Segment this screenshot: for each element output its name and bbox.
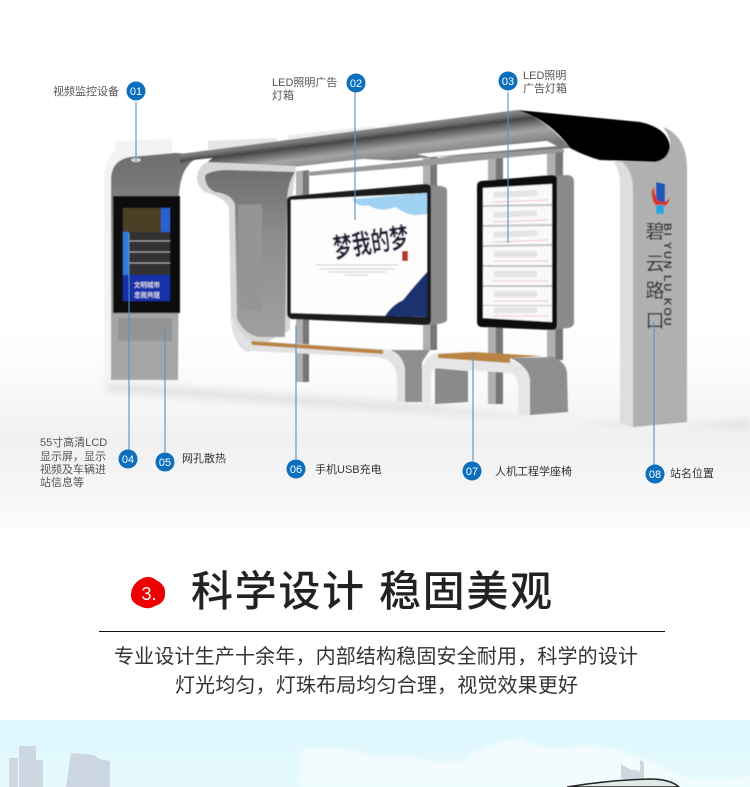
callout 04: 显示屏，显示: [40, 450, 106, 463]
callout 03: LED照明: [523, 69, 566, 82]
title: 科学设计 稳固美观: [191, 568, 552, 615]
poster 2: timetable: [477, 175, 574, 330]
callout 02: 灯箱: [272, 88, 294, 102]
callout 08: 08: [649, 469, 661, 481]
callout 05: [156, 451, 226, 472]
callout 08: [646, 464, 714, 484]
subtitle text: [114, 645, 638, 697]
middle shelter body: [197, 162, 430, 402]
bench 1 band: [231, 318, 405, 402]
callout 06: 手机USB充电: [315, 462, 382, 476]
next roof: [567, 779, 679, 787]
right tower: [621, 760, 644, 779]
callout lines: [129, 92, 654, 465]
subtitle text: 专业设计生产十余年，内部结构稳固安全耐用，科学的设计: [114, 645, 638, 668]
station name: 碧: [645, 221, 665, 243]
callout 06: [286, 460, 382, 478]
LCD screen: [113, 196, 180, 313]
next section: sky scene: [0, 720, 750, 787]
station name: 口: [645, 311, 665, 332]
poster calligraphy: 梦我的梦: [331, 222, 411, 264]
callout 06: 06: [290, 464, 302, 476]
posts: [296, 145, 563, 404]
callout 02: [272, 74, 366, 102]
callout 04: 04: [122, 454, 134, 466]
black roof end: [517, 110, 670, 162]
illustration: bus shelter: [104, 110, 750, 430]
callout 03: [498, 69, 567, 95]
callout 02: LED照明广告: [272, 76, 337, 89]
left column: 文明城市: [134, 280, 160, 289]
roof: [180, 110, 670, 176]
callout 01: [53, 82, 146, 100]
section badge: 3.: 3.: [141, 584, 157, 604]
left buildings: [9, 746, 110, 787]
video camera: [131, 158, 141, 162]
logo: [656, 182, 665, 205]
station name: 云: [645, 254, 665, 275]
callout 04: 站信息等: [40, 475, 84, 489]
callout 03: 广告灯箱: [523, 81, 567, 95]
callout 07: 07: [466, 466, 478, 478]
bench wood 2: [438, 352, 542, 363]
callout 05: 05: [159, 457, 171, 469]
callout 07: [462, 462, 572, 480]
station name: 路: [645, 280, 665, 302]
station name: [645, 221, 673, 332]
floor shadows: [105, 382, 750, 430]
bench 2: [422, 352, 568, 415]
section badge: 3.: [131, 577, 165, 608]
poster 1: [287, 184, 447, 325]
callout 08: 站名位置: [670, 466, 714, 480]
callout 03: 03: [502, 76, 514, 88]
subtitle text: 灯光均匀，灯珠布局均匀合理，视觉效果更好: [175, 674, 578, 697]
background: showroom floor: [0, 330, 750, 528]
left column: 忠我共建: [134, 290, 160, 299]
vent mesh: [118, 318, 172, 341]
callout 05: 网孔散热: [182, 451, 226, 465]
callout 01: 01: [130, 86, 142, 98]
callout 07: 人机工程学座椅: [495, 464, 572, 478]
right column with station name: [613, 127, 687, 427]
callout 02: 02: [350, 78, 362, 90]
divider: [99, 631, 665, 632]
bench wood 1: [251, 341, 383, 354]
callout 04: [40, 435, 138, 489]
clouds: [299, 738, 750, 787]
left column: [104, 139, 206, 383]
callout 04: 55寸高清LCD: [40, 435, 107, 449]
station name: BI YUN LU KOU: [661, 223, 673, 326]
callout 04: 视频及车辆进: [40, 462, 106, 476]
callout 01: 视频监控设备: [53, 84, 119, 98]
